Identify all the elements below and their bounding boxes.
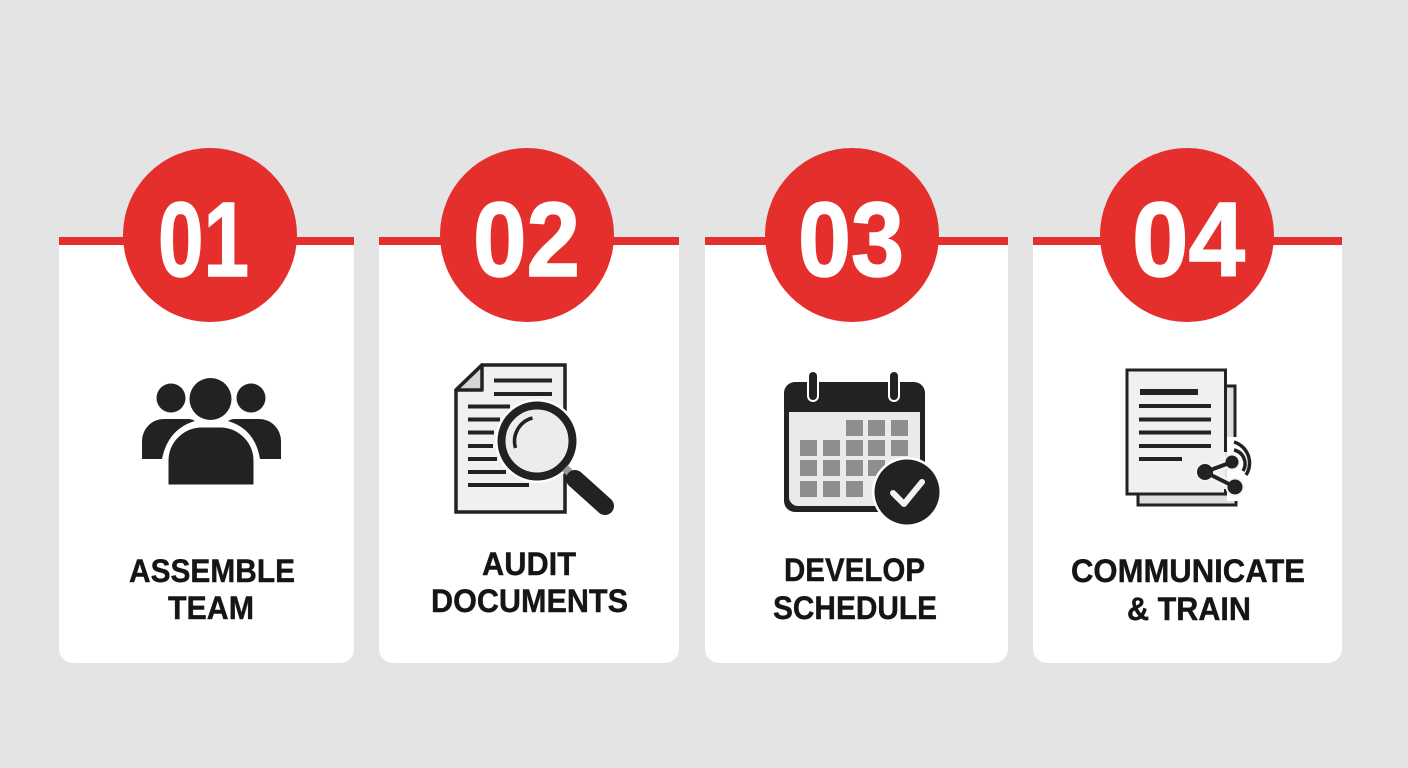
label: communicate and train: COMMUNICATE bbox=[1071, 553, 1305, 589]
icon: calendar with check mark bbox=[784, 371, 942, 527]
number badge 04: 04 bbox=[1132, 181, 1245, 299]
label: audit documents: AUDIT bbox=[482, 546, 576, 582]
panel: step 1 assemble team bbox=[59, 148, 354, 663]
number badge 03 bbox=[765, 148, 939, 322]
label: audit documents: DOCUMENTS bbox=[431, 583, 628, 619]
number badge 01: 01 bbox=[158, 181, 249, 299]
number badge 04 bbox=[1100, 148, 1274, 322]
label: assemble team: TEAM bbox=[168, 590, 254, 626]
label: assemble team: ASSEMBLE bbox=[129, 553, 295, 589]
icon: documents with share symbol bbox=[1127, 370, 1250, 505]
panel: step 3 develop schedule bbox=[705, 148, 1008, 663]
label: assemble team bbox=[129, 553, 295, 626]
label: develop schedule: DEVELOP bbox=[784, 552, 925, 588]
number badge 03: 03 bbox=[798, 181, 904, 299]
icon: team of people bbox=[142, 378, 281, 484]
icon: document with magnifying glass bbox=[456, 365, 605, 512]
panel: step 4 communicate and train bbox=[1033, 148, 1342, 663]
number badge 01 bbox=[123, 148, 297, 322]
label: communicate and train bbox=[1071, 553, 1305, 627]
number badge 02: 02 bbox=[473, 181, 580, 299]
label: develop schedule: SCHEDULE bbox=[773, 590, 937, 626]
label: audit documents bbox=[431, 546, 628, 619]
label: develop schedule bbox=[773, 552, 937, 626]
panel: step 2 audit documents bbox=[379, 148, 679, 663]
number badge 02 bbox=[440, 148, 614, 322]
label: communicate and train: & TRAIN bbox=[1127, 591, 1251, 627]
